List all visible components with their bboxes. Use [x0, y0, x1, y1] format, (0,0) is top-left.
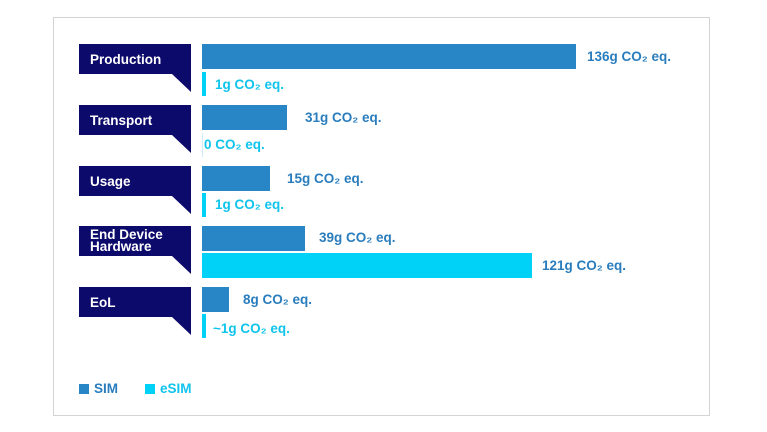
value: SIM usage: 15g CO₂ eq. [287, 171, 364, 186]
label: End Device Hardware: End Device [90, 227, 163, 242]
value: eSIM transport: 0 CO₂ eq. [204, 137, 265, 152]
bar: eSIM usage [202, 193, 206, 217]
value: eSIM hardware: 121g CO₂ eq. [542, 258, 626, 273]
legend: eSIM: eSIM [160, 381, 192, 396]
label: End Device Hardware: Hardware [90, 239, 152, 254]
value: SIM EoL: 8g CO₂ eq. [243, 292, 312, 307]
bar: SIM hardware [202, 226, 305, 251]
label tail [172, 135, 191, 153]
label: End Device Hardware [79, 226, 191, 256]
bar: eSIM transport [202, 133, 203, 157]
frame [53, 17, 710, 416]
legend: eSIM [145, 381, 192, 396]
bar: eSIM production [202, 72, 206, 96]
label: Usage: Usage [90, 174, 131, 188]
bar: SIM transport [202, 105, 287, 130]
label tail [172, 74, 191, 92]
row: Production [79, 44, 671, 96]
legend [79, 381, 192, 396]
value: SIM hardware: 39g CO₂ eq. [319, 230, 396, 245]
row: Transport [79, 105, 382, 157]
value: SIM transport: 31g CO₂ eq. [305, 110, 382, 125]
label: EoL: EoL [90, 294, 116, 310]
row: EoL [79, 287, 312, 338]
label tail [172, 196, 191, 214]
bar: eSIM EoL [202, 314, 206, 338]
row: End Device Hardware [79, 226, 626, 278]
label: EoL [79, 287, 191, 317]
label: Production: Production [90, 52, 161, 66]
value: eSIM production: 1g CO₂ eq. [215, 77, 284, 92]
label tail [172, 256, 191, 274]
label: Usage [79, 166, 191, 196]
value: SIM production: 136g CO₂ eq. [587, 49, 671, 64]
bar: SIM production [202, 44, 576, 69]
label: Transport: Transport [90, 112, 152, 128]
bar: SIM EoL [202, 287, 229, 312]
bar: SIM usage [202, 166, 270, 191]
row: Usage [79, 166, 364, 217]
label tail [172, 317, 191, 335]
bar: eSIM hardware [202, 253, 532, 278]
legend: SIM [79, 381, 118, 396]
value: eSIM usage: 1g CO₂ eq. [215, 197, 284, 212]
label: Production [79, 44, 191, 74]
legend: SIM: SIM [94, 381, 118, 396]
value: eSIM EoL: ~1g CO₂ eq. [213, 321, 290, 336]
label: Transport [79, 105, 191, 135]
